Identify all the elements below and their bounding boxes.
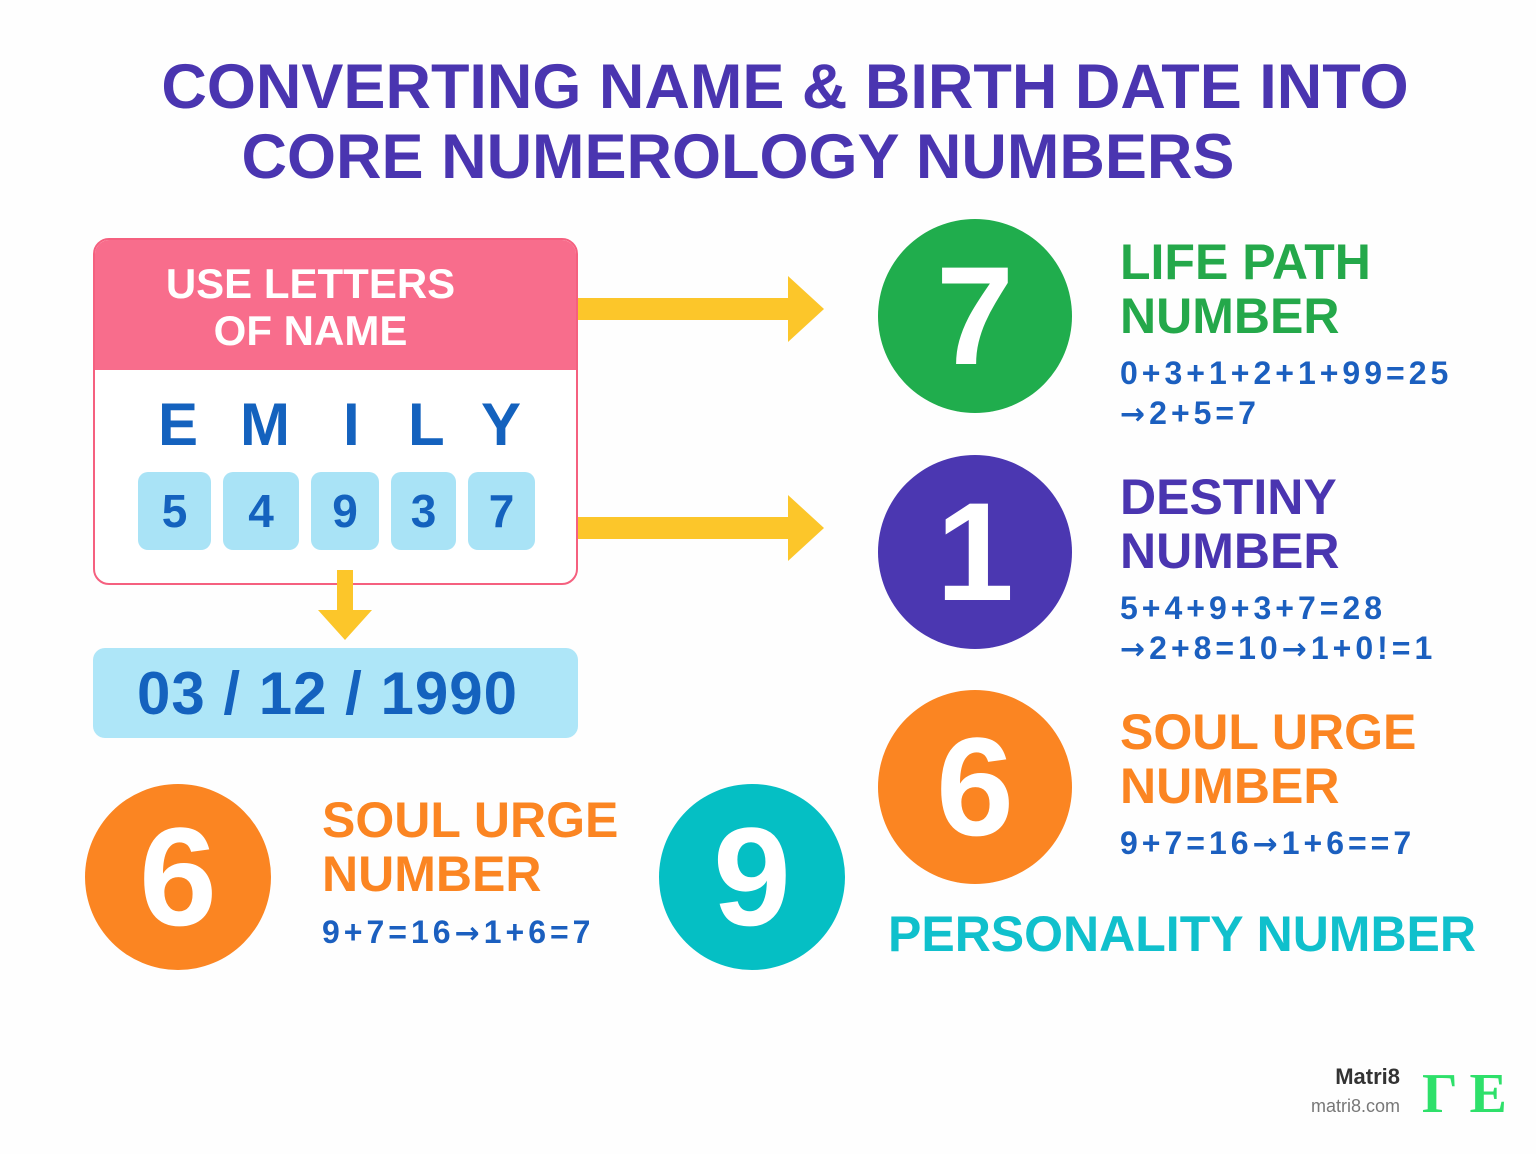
life path formula: 0+3+1+2+1+99=25 bbox=[1120, 355, 1452, 391]
arrow: to destiny bbox=[578, 495, 824, 561]
date box bbox=[93, 648, 578, 738]
destiny formula: 5+4+9+3+7=28 bbox=[1120, 590, 1386, 626]
title bbox=[161, 52, 1409, 192]
soul urge formula left: 9+7=16→1+6=7 bbox=[322, 914, 594, 951]
footer brand: matri8.com bbox=[1311, 1096, 1400, 1116]
letters EMILY bbox=[158, 391, 521, 458]
circle 1: 1 bbox=[936, 473, 1014, 630]
letters EMILY: E bbox=[158, 391, 198, 458]
life path heading bbox=[1120, 234, 1371, 344]
circle 1 bbox=[878, 455, 1072, 649]
personality label: PERSONALITY NUMBER bbox=[888, 906, 1476, 962]
panel: name card bbox=[93, 238, 578, 585]
life path heading: NUMBER bbox=[1120, 288, 1339, 344]
letters EMILY: I bbox=[343, 391, 360, 458]
arrow: to life path bbox=[578, 276, 824, 342]
text: 5 bbox=[162, 485, 187, 537]
footer brand bbox=[1311, 1064, 1400, 1116]
card header: OF NAME bbox=[214, 307, 407, 354]
arrow: down bbox=[318, 570, 372, 640]
title: CONVERTING NAME & BIRTH DATE INTO bbox=[161, 52, 1409, 122]
destiny heading: NUMBER bbox=[1120, 523, 1339, 579]
text: 4 bbox=[248, 485, 274, 537]
letters EMILY: Y bbox=[481, 391, 521, 458]
soul urge heading right: NUMBER bbox=[1120, 758, 1339, 814]
circle 9: 9 bbox=[713, 798, 791, 955]
soul urge heading left bbox=[322, 792, 618, 902]
date box: 03 / 12 / 1990 bbox=[137, 660, 518, 727]
card header: USE LETTERS bbox=[166, 260, 455, 307]
circle 9 bbox=[659, 784, 845, 970]
footer brand: Matri8 bbox=[1335, 1064, 1400, 1089]
letters EMILY: L bbox=[408, 391, 445, 458]
destiny heading: DESTINY bbox=[1120, 469, 1337, 525]
logo glyph: Γ Ε bbox=[1422, 1063, 1507, 1125]
soul urge heading right bbox=[1120, 704, 1416, 814]
destiny formula bbox=[1120, 590, 1436, 667]
destiny formula: →2+8=10→1+0!=1 bbox=[1120, 630, 1436, 667]
title: CORE NUMEROLOGY NUMBERS bbox=[242, 122, 1234, 192]
destiny heading bbox=[1120, 469, 1339, 579]
text: 9 bbox=[332, 485, 358, 537]
text: 3 bbox=[411, 485, 436, 537]
circle 6 left bbox=[85, 784, 271, 970]
soul urge heading right: SOUL URGE bbox=[1120, 704, 1416, 760]
circle 7: 7 bbox=[936, 237, 1014, 394]
life path formula: →2+5=7 bbox=[1120, 395, 1260, 432]
circle 6 right bbox=[878, 690, 1072, 884]
soul urge heading left: SOUL URGE bbox=[322, 792, 618, 848]
text: 7 bbox=[489, 485, 514, 537]
card header bbox=[95, 240, 576, 370]
life path formula bbox=[1120, 355, 1452, 432]
circle 6 right: 6 bbox=[936, 708, 1014, 865]
circle 6 left: 6 bbox=[139, 798, 217, 955]
letters EMILY: M bbox=[240, 391, 290, 458]
soul urge heading left: NUMBER bbox=[322, 846, 541, 902]
circle 7 bbox=[878, 219, 1072, 413]
soul urge formula right: 9+7=16→1+6==7 bbox=[1120, 825, 1415, 862]
number boxes bbox=[138, 472, 535, 550]
life path heading: LIFE PATH bbox=[1120, 234, 1371, 290]
